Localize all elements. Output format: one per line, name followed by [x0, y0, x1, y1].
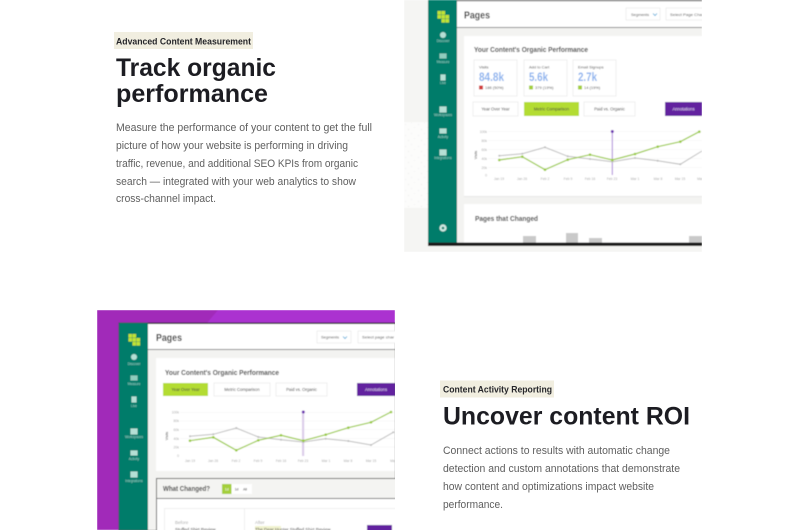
line chart: 80k: [174, 419, 179, 423]
app header: Segments: [631, 12, 649, 17]
line chart: Jan 26: [208, 459, 218, 463]
line chart: 0: [485, 174, 487, 178]
app header: Select Page Cha: [670, 12, 703, 17]
logo: [128, 334, 140, 346]
sidebar navigation: Discover: [437, 39, 450, 43]
line chart: Jan 19: [494, 177, 504, 181]
sidebar navigation: Live: [131, 404, 137, 408]
what changed panel: What Changed?: [163, 484, 210, 493]
line chart: Mar: [697, 177, 704, 181]
before and after comparison: [164, 508, 396, 530]
sidebar navigation: Measure: [128, 382, 141, 386]
sidebar navigation: Measure: [437, 60, 450, 64]
range tabs: 1d: [225, 488, 229, 492]
heading: Uncover content ROI: [443, 402, 690, 430]
comparison buttons: Paid vs. Organic: [594, 106, 625, 112]
what changed panel: [156, 478, 396, 530]
line chart: 80k: [482, 139, 487, 143]
logo: [438, 11, 449, 23]
before and after comparison: Before: [175, 520, 189, 525]
comparison buttons: [163, 383, 395, 396]
pages that changed card: [464, 204, 702, 243]
line chart: Visits: [474, 151, 478, 159]
line chart: Mar 15: [675, 177, 685, 181]
line chart: Feb 2: [541, 177, 549, 181]
eyebrow label: Content Activity Reporting: [443, 384, 552, 394]
range tabs: All: [243, 488, 247, 492]
metric: visits: 84.8k: [479, 70, 504, 84]
performance card: [156, 358, 397, 471]
body text: how content and optimizations impact website: [443, 481, 654, 493]
line chart: 100k: [480, 130, 487, 134]
body text: Connect actions to results with automatic change: [443, 445, 670, 457]
body text: detection and custom annotations that demonstrate: [443, 463, 680, 475]
metric: visits: Visits: [479, 64, 488, 70]
metric: visits: 186 (50%): [485, 85, 504, 90]
body text: cross-channel impact.: [116, 193, 216, 205]
body text: search — integrated with your web analytics to show: [116, 176, 356, 188]
app header: [148, 324, 400, 350]
line chart: 60k: [482, 148, 487, 152]
line chart: 20k: [482, 166, 487, 170]
metric: email signups: Email Signups: [578, 64, 604, 70]
line chart: 0: [177, 454, 179, 458]
comparison buttons: Annotations: [672, 106, 695, 112]
comparison buttons: Paid vs. Organic: [286, 387, 317, 392]
heading: [116, 54, 276, 108]
range tabs: [222, 484, 252, 494]
comparison buttons: Metric Comparison: [534, 106, 570, 112]
metric: email signups: 14 (19%): [584, 85, 601, 90]
app header: Segments: [321, 334, 339, 340]
line chart: Feb 23: [298, 459, 308, 463]
sidebar navigation: Integrations: [434, 156, 452, 160]
sidebar navigation: [119, 323, 148, 530]
before and after comparison: After: [255, 520, 265, 525]
metric: add to cart: Add to Cart: [529, 64, 550, 70]
body text: [116, 122, 372, 205]
heading: performance: [116, 80, 268, 108]
metric: visits: [474, 60, 517, 96]
panel: uncover content ROI copy: [440, 380, 690, 511]
line chart: Feb 16: [276, 459, 286, 463]
eyebrow label: [440, 380, 554, 398]
sidebar navigation: [428, 0, 457, 243]
line chart: Jan 26: [517, 177, 527, 181]
performance card: Your Content's Organic Performance: [165, 368, 279, 377]
line chart: Feb 9: [564, 177, 572, 181]
metric: email signups: [573, 60, 616, 96]
sidebar navigation: Discover: [128, 362, 141, 366]
pages that changed card: Pages that Changed: [475, 214, 538, 223]
line chart: Mar 1: [322, 459, 330, 463]
line chart: Mar 8: [344, 459, 352, 463]
body text: picture of how your website is performing in driving: [116, 140, 348, 152]
comparison buttons: Year Over Year: [171, 387, 200, 392]
line chart: Jan 19: [185, 459, 195, 463]
comparison buttons: Annotations: [365, 387, 387, 392]
sidebar navigation: Workspaces: [125, 435, 143, 439]
sidebar navigation: Workspaces: [434, 113, 452, 117]
panel: organic performance dashboard screenshot: [404, 0, 706, 252]
eyebrow label: [114, 32, 253, 49]
line chart: Feb 9: [254, 459, 262, 463]
body text: Measure the performance of your content to get the full: [116, 122, 372, 134]
sidebar navigation: Integrations: [125, 479, 143, 483]
heading: Track organic: [116, 54, 276, 82]
line chart: 20k: [174, 446, 179, 450]
line chart: Feb 16: [585, 177, 595, 181]
comparison buttons: Year Over Year: [481, 106, 510, 112]
panel: content activity dashboard screenshot: [97, 310, 400, 530]
line chart: Mar 8: [654, 177, 662, 181]
comparison buttons: [473, 102, 702, 116]
body text: performance.: [443, 499, 503, 511]
comparison buttons: Metric Comparison: [224, 387, 260, 392]
line chart: Mar: [390, 459, 397, 463]
metric: add to cart: [524, 60, 567, 96]
line chart: 40k: [174, 437, 179, 441]
metric: email signups: 2.7k: [578, 70, 597, 84]
app header: Select page char: [362, 334, 395, 340]
line chart: [474, 130, 704, 181]
line chart: Feb 2: [232, 459, 240, 463]
line chart: 60k: [174, 428, 179, 432]
body text: traffic, revenue, and additional SEO KPIs from organic: [116, 158, 358, 170]
eyebrow label: Advanced Content Measurement: [116, 36, 251, 46]
line chart: 100k: [172, 410, 179, 414]
line chart: 40k: [482, 157, 487, 161]
range tabs: 1d: [235, 488, 238, 492]
sidebar navigation: Activity: [129, 457, 140, 461]
line chart: Feb 23: [607, 177, 617, 181]
line chart: Visits: [165, 432, 169, 440]
performance card: Your Content's Organic Performance: [474, 45, 588, 54]
line chart: [165, 410, 397, 463]
sidebar navigation: Live: [440, 81, 446, 85]
sidebar navigation: Activity: [438, 135, 449, 139]
metric: add to cart: 379 (19%): [535, 85, 554, 90]
line chart: Mar 15: [366, 459, 376, 463]
app header: Pages: [464, 10, 490, 22]
app header: [457, 0, 706, 28]
app header: Pages: [156, 332, 182, 344]
line chart: Mar 1: [631, 177, 639, 181]
metric: add to cart: 5.6k: [529, 70, 548, 84]
performance card: [464, 36, 704, 197]
body text: [443, 445, 680, 511]
panel: track organic performance copy: [114, 32, 372, 205]
